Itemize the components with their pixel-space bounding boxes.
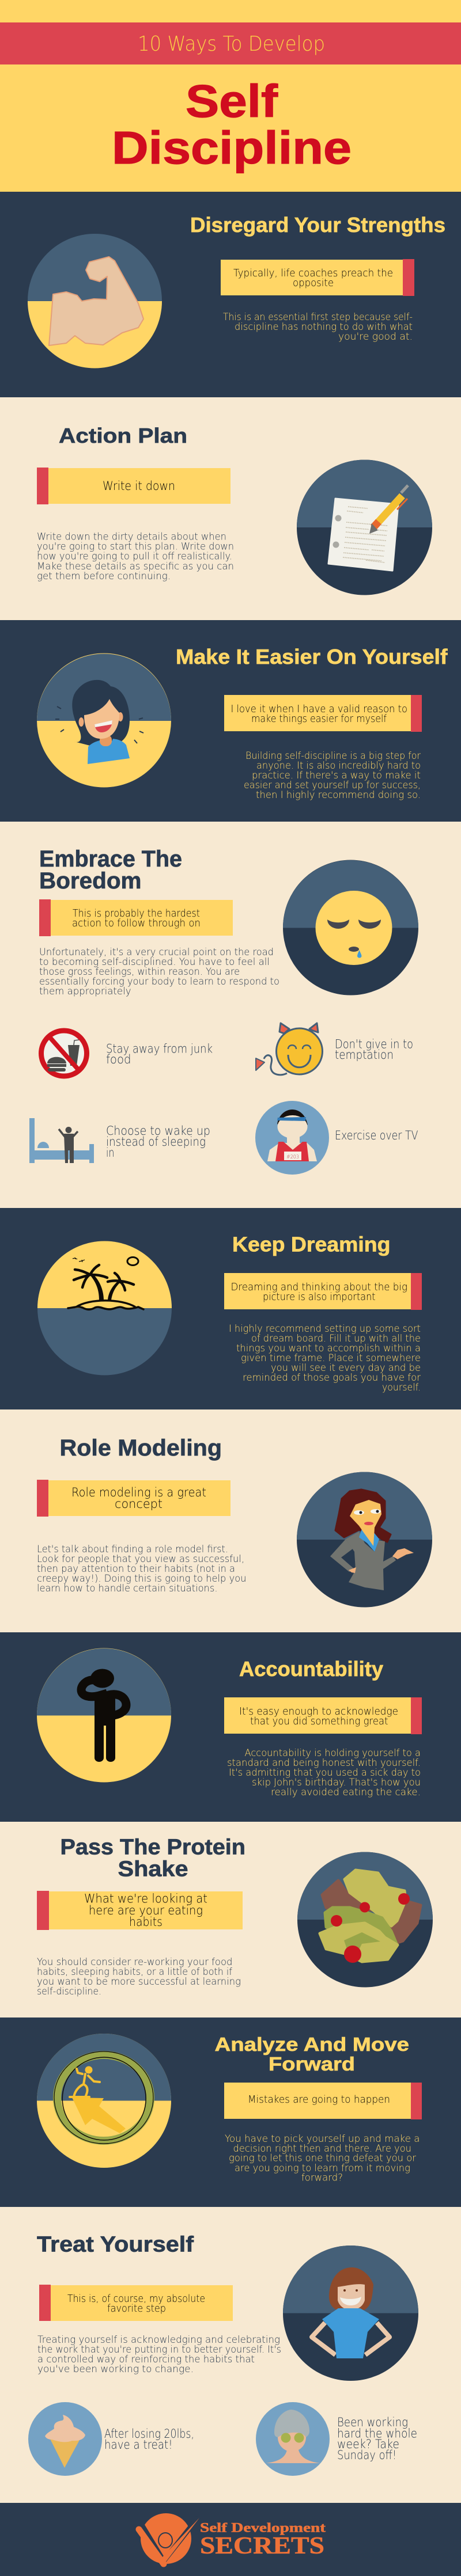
body text: self-discipline. (37, 1986, 101, 1997)
body text: essentially forcing your body to learn to respond to (39, 976, 279, 987)
heading (214, 2034, 409, 2075)
subtitle: 10 Ways To Develop (138, 32, 325, 56)
callout: favorite step (107, 2303, 166, 2315)
icon: no junk food (41, 1031, 86, 1076)
icon: paper and pen (297, 459, 432, 595)
body text: then I highly recommend doing so. (256, 789, 421, 801)
callout: habits (129, 1915, 163, 1929)
label: Been working (337, 2415, 408, 2429)
label: Exercise over TV (335, 1129, 418, 1142)
heading: Role Modeling (60, 1435, 222, 1461)
body text: This is an essential first step because self- (223, 311, 413, 323)
callout: opposite (293, 277, 334, 289)
panel: analyze and move forward (0, 2018, 461, 2207)
body text: you're going to start this plan. Write down (37, 541, 234, 553)
logo text: Self Development (200, 2521, 326, 2535)
callout (37, 1891, 243, 1930)
panel: keep dreaming (0, 1208, 461, 1409)
body text (37, 2334, 281, 2375)
body text: Write down the dirty details about when (37, 531, 226, 542)
body text: Building self-discipline is a big step for (245, 750, 421, 762)
callout: picture is also important (263, 1291, 376, 1303)
body text: them appropriately (39, 986, 131, 997)
body text: given time frame. Place it somewhere (241, 1352, 421, 1364)
main title (112, 75, 352, 173)
label (104, 2427, 194, 2452)
heading: Forward (269, 2053, 355, 2075)
callout: Dreaming and thinking about the big (231, 1281, 407, 1293)
panel: embrace the boredom (0, 822, 461, 1208)
heading (60, 1836, 245, 1882)
label: hard the whole (337, 2426, 417, 2440)
label: food (106, 1053, 131, 1066)
logo mark (139, 2513, 199, 2564)
body text: yourself. (382, 1382, 421, 1393)
main title: Self (186, 75, 278, 127)
body text: skip John's birthday. That's how you (252, 1777, 421, 1788)
label: week? Take (337, 2437, 399, 2451)
icon: ice cream (28, 2402, 102, 2476)
label (106, 1124, 210, 1160)
body text: anyone. It is also incredibly hard to (256, 760, 421, 772)
body text: really avoided eating the cake. (271, 1787, 421, 1798)
heading: Treat Yourself (37, 2233, 194, 2257)
panel: action plan (0, 397, 461, 620)
heading: Shake (118, 1857, 188, 1882)
body text (229, 1323, 421, 1393)
body text (223, 311, 413, 343)
heading: Make It Easier On Yourself (176, 645, 448, 668)
label: temptation (335, 1048, 394, 1062)
label: Choose to wake up (106, 1124, 210, 1138)
body text: reminded of those goals you have for (243, 1372, 421, 1384)
callout: concept (115, 1497, 163, 1511)
callout (224, 1273, 422, 1310)
body text: creepy way!). Doing this is going to help you (37, 1573, 247, 1585)
panel: disregard your strengths (0, 192, 461, 397)
label: Don't give in to (335, 1038, 413, 1051)
heading: Keep Dreaming (232, 1232, 391, 1256)
callout: Role modeling is a great (71, 1485, 206, 1499)
body text: discipline has nothing to do with what (235, 321, 413, 333)
label: in (106, 1146, 114, 1160)
label (106, 1042, 213, 1066)
icon: businesswoman (297, 1472, 432, 1608)
callout (221, 259, 414, 296)
body text: habits, sleeping habits, or a little of both if (37, 1966, 232, 1978)
body text (227, 1747, 421, 1798)
label: After losing 20lbs, (104, 2427, 194, 2441)
heading (39, 846, 182, 894)
body text: Unfortunately, it's a very crucial point on the road (39, 947, 274, 958)
body text: going to let this one thing defeat you or (229, 2152, 416, 2164)
body text: forward? (301, 2172, 343, 2183)
body text: practice. If there's a way to make it (252, 770, 421, 781)
body text: then pay attention to their habits (not in a (37, 1563, 235, 1575)
body text: you want to be more successful at learning (37, 1976, 241, 1988)
body text: Let's talk about finding a role model first. (37, 1544, 228, 1555)
body text: It's admitting that you used a sick day to (229, 1767, 421, 1779)
body text (39, 947, 279, 997)
body text: you've been working to change. (37, 2364, 194, 2375)
callout (39, 899, 233, 936)
body text: get them before continuing. (37, 571, 171, 582)
callout (224, 695, 422, 732)
body text: You should consider re-working your food (37, 1956, 233, 1968)
icon: thinking figure (37, 1648, 171, 1783)
icon: devil smiley (256, 1023, 323, 1075)
label: have a treat! (104, 2438, 173, 2452)
callout: Typically, life coaches preach the (233, 267, 393, 279)
icon: salad (297, 1852, 433, 1988)
body text (37, 1956, 241, 1997)
icon: flexed arm (28, 234, 162, 368)
body text: you're good at. (338, 331, 413, 343)
callout: Write it down (103, 479, 175, 493)
icon: surfer in ring (37, 2034, 171, 2168)
icon: spa day (256, 2402, 330, 2476)
panel: make it easier (0, 620, 461, 822)
main title: Discipline (112, 122, 352, 173)
label: instead of sleeping (106, 1135, 206, 1149)
body text: of dream board. Fill it up with all the (251, 1333, 421, 1344)
callout (37, 468, 231, 504)
body text: Accountability is holding yourself to a (244, 1747, 421, 1759)
callout: This is, of course, my absolute (67, 2293, 205, 2305)
body text (225, 2133, 420, 2183)
body text: standard and being honest with yourself. (227, 1757, 421, 1769)
label: Sunday off! (337, 2448, 396, 2462)
body text: to becoming self-disciplined. You have to feel all (39, 956, 270, 968)
label (337, 2415, 417, 2462)
icon: runner (255, 1101, 329, 1175)
panel: treat yourself (0, 2207, 461, 2503)
callout: It's easy enough to acknowledge (239, 1705, 398, 1718)
icon: island (37, 1241, 172, 1375)
footer (0, 2503, 461, 2576)
panel: accountability (0, 1632, 461, 1822)
callout: that you did something great (250, 1715, 388, 1727)
body text: Make these details as specific as you can (37, 561, 234, 572)
icon: sleepy face (283, 860, 418, 995)
heading: Accountability (239, 1657, 383, 1681)
callout (37, 1480, 231, 1517)
logo text: SECRETS (200, 2533, 324, 2559)
body text (244, 750, 421, 801)
heading: Embrace The (39, 846, 182, 872)
header banner (0, 0, 461, 192)
icon: getting out of bed (29, 1118, 94, 1163)
body text: You have to pick yourself up and make a (225, 2133, 420, 2145)
label (335, 1038, 413, 1062)
body text: I highly recommend setting up some sort (229, 1323, 421, 1335)
body text: the work that you're putting in to better yourself. It's (37, 2344, 281, 2355)
icon: smiling woman (283, 2246, 418, 2381)
callout: here are your eating (89, 1903, 203, 1917)
callout: What we're looking at (84, 1892, 207, 1906)
label: Stay away from junk (106, 1042, 213, 1056)
body text: those gross feelings, within reason. You are (39, 966, 240, 978)
callout: action to follow through on (72, 917, 201, 929)
icon: runner: #203 (286, 1154, 299, 1160)
heading: Pass The Protein (60, 1836, 245, 1860)
logo text (200, 2521, 326, 2559)
heading: Boredom (39, 868, 142, 894)
callout: I love it when I have a valid reason to (231, 703, 407, 715)
body text: learn how to handle certain situations. (37, 1583, 218, 1594)
body text: Treating yourself is acknowledging and celebrating (37, 2334, 280, 2346)
body text: are you going to learn from it moving (235, 2163, 410, 2174)
panel: role modeling (0, 1409, 461, 1632)
heading: Analyze And Move (214, 2034, 409, 2055)
body text: decision right then and there. Are you (233, 2143, 411, 2155)
body text: Look for people that you view as successful, (37, 1553, 244, 1565)
callout: make things easier for myself (251, 713, 387, 725)
heading: Disregard Your Strengths (190, 213, 445, 237)
body text (37, 531, 234, 582)
body text: how you're going to pull it off realistically. (37, 550, 232, 562)
callout: This is probably the hardest (73, 907, 200, 920)
callout (39, 2285, 233, 2321)
heading: Action Plan (59, 424, 187, 447)
body text: you will see it every day and be (271, 1362, 421, 1374)
body text: easier and set yourself up for success, (244, 780, 421, 791)
callout (224, 2083, 422, 2119)
icon: happy woman (37, 653, 171, 788)
callout (224, 1697, 422, 1734)
callout: Mistakes are going to happen (248, 2094, 390, 2106)
body text: a controlled way of reinforcing the habits that (37, 2354, 255, 2365)
panel: pass the protein shake (0, 1822, 461, 2018)
body text: things you want to accomplish within a (236, 1343, 421, 1354)
body text (37, 1544, 247, 1594)
